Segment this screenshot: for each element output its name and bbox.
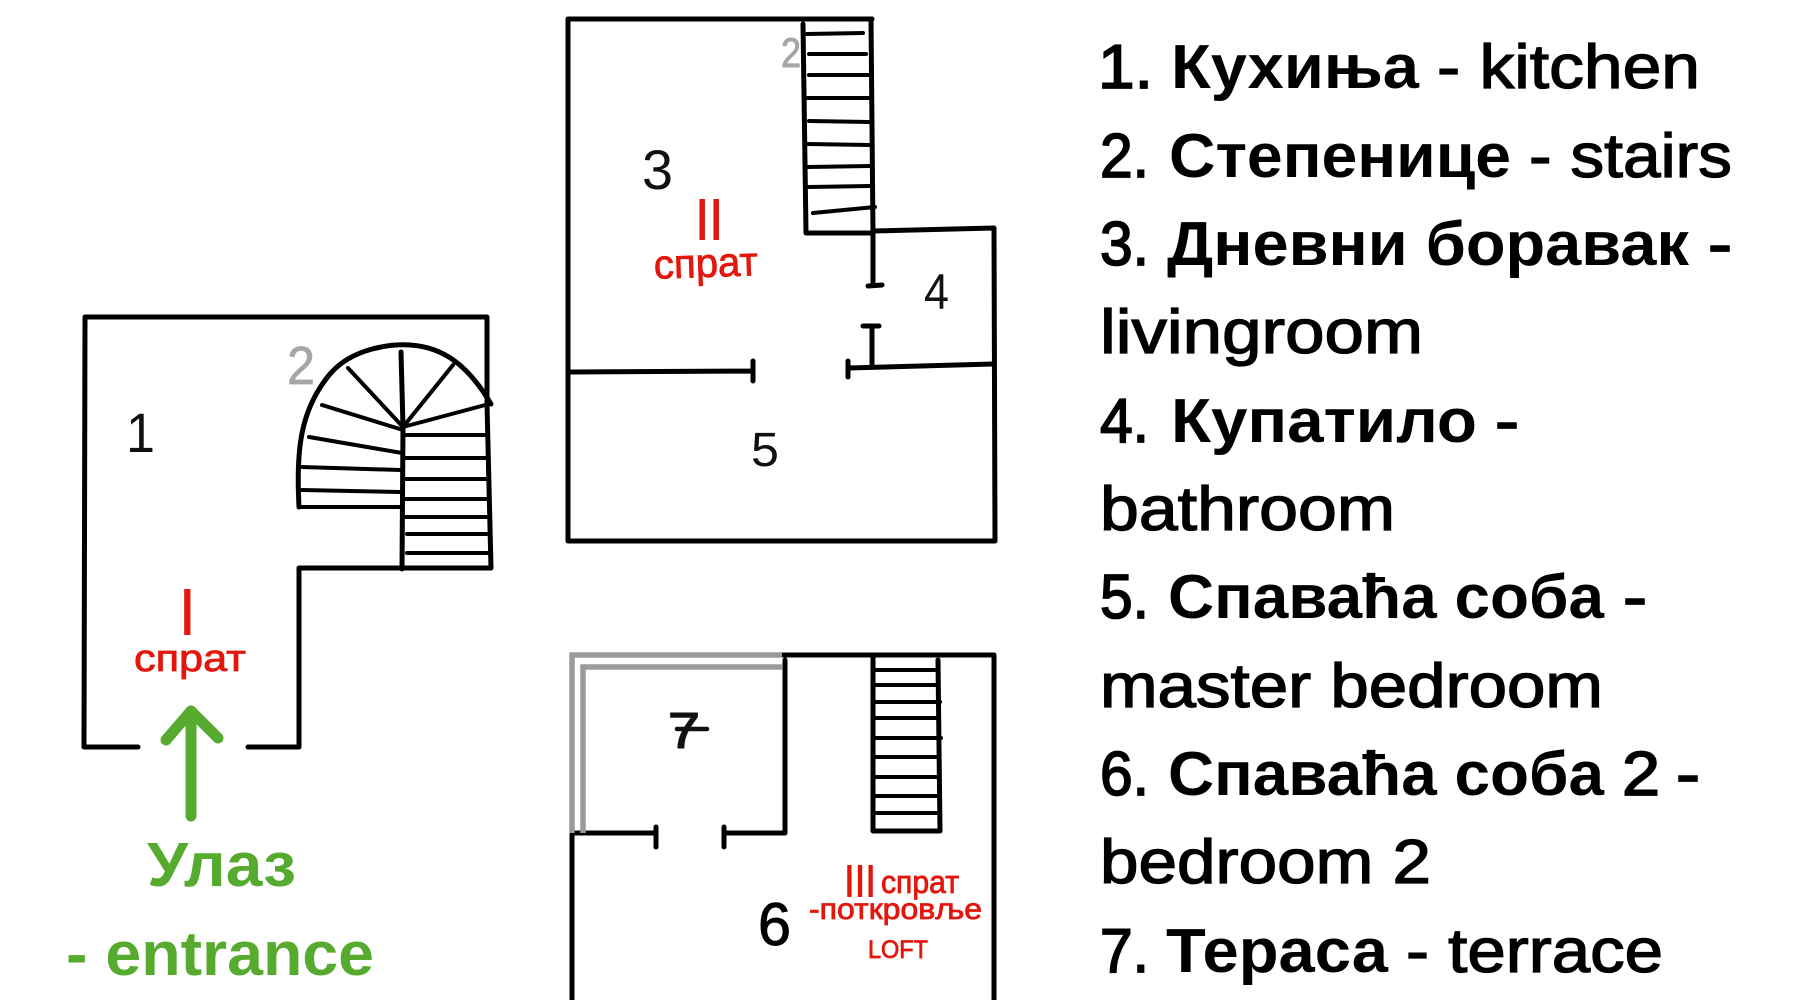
- legend item 7: Тераса: [1166, 917, 1389, 986]
- room number 7: 7: [668, 703, 700, 759]
- room number 5: 5: [751, 424, 779, 477]
- floor label: second floor: спрат: [653, 238, 759, 288]
- legend item 4: [1100, 387, 1519, 456]
- icon: loft stairs: [873, 657, 941, 831]
- floor label: first floor: I: [178, 575, 197, 650]
- legend item 3: Дневни боравак: [1167, 210, 1690, 279]
- legend item 1: [1098, 33, 1700, 102]
- room number 3: 3: [642, 138, 673, 201]
- legend item 7: [1100, 917, 1663, 986]
- floor label: second floor: II: [694, 187, 724, 253]
- third floor walls: [572, 655, 994, 1000]
- legend item 6: 2: [1622, 740, 1660, 809]
- legend item 7: 7.: [1100, 917, 1149, 986]
- panel: first floor plan: [66, 317, 491, 989]
- legend item 2: [1100, 122, 1732, 191]
- legend item 6: 6.: [1100, 740, 1149, 809]
- legend item 2: Степенице: [1169, 122, 1511, 191]
- terrace grey railing: [572, 655, 782, 833]
- second floor walls: [568, 19, 995, 541]
- floor label: loft: -поткровље: [809, 893, 982, 926]
- legend item 4: -: [1495, 387, 1519, 456]
- icon: spiral stairs: [298, 345, 491, 569]
- entrance label: Улаз: [147, 831, 296, 900]
- room number 2: 2: [287, 336, 315, 396]
- legend item 6 continuation: bedroom 2: [1100, 828, 1431, 897]
- legend item 5: Спаваћа соба: [1168, 563, 1605, 632]
- legend item 6: -: [1676, 740, 1700, 809]
- legend: room list: [1098, 33, 1732, 986]
- entrance label: [66, 831, 374, 989]
- room number 2: 2: [781, 29, 801, 76]
- legend item 4: 4.: [1100, 387, 1149, 456]
- entrance label: - entrance: [66, 920, 374, 989]
- legend item 1: Кухиња: [1171, 33, 1420, 102]
- arrow: entrance: [166, 711, 218, 816]
- legend item 6: Спаваћа соба: [1168, 740, 1605, 809]
- floor label: loft: III: [843, 855, 877, 907]
- floor label: first floor: спрат: [134, 638, 246, 680]
- legend item 5: -: [1623, 563, 1647, 632]
- room number 4: 4: [924, 264, 949, 320]
- floor label: first floor: [134, 575, 246, 680]
- floor label: loft: спрат: [881, 864, 959, 900]
- legend item 3: -: [1708, 210, 1732, 279]
- legend item 1: 1.: [1098, 33, 1153, 102]
- floor label: second floor: [653, 187, 759, 288]
- legend item 1: - kitchen: [1437, 33, 1700, 102]
- room number 1: 1: [126, 401, 155, 464]
- panel: second floor plan: [568, 19, 995, 541]
- legend item 5 continuation: master bedroom: [1100, 652, 1603, 721]
- first floor walls: [84, 317, 491, 747]
- legend item 3 continuation: livingroom: [1100, 298, 1423, 367]
- legend item 2: - stairs: [1529, 122, 1732, 191]
- room number 6: 6: [758, 891, 791, 958]
- floor label: loft: [809, 855, 982, 964]
- legend item 4: Купатило: [1171, 387, 1477, 456]
- floor label: loft: LOFT: [868, 936, 928, 964]
- panel: third floor plan: [572, 655, 994, 1000]
- legend item 2: 2.: [1100, 122, 1149, 191]
- legend item 7: - terrace: [1406, 917, 1663, 986]
- legend item 3: 3.: [1100, 210, 1149, 279]
- legend item 5: 5.: [1100, 563, 1149, 632]
- icon: straight stairs: [803, 19, 875, 233]
- legend item 4 continuation: bathroom: [1100, 475, 1395, 544]
